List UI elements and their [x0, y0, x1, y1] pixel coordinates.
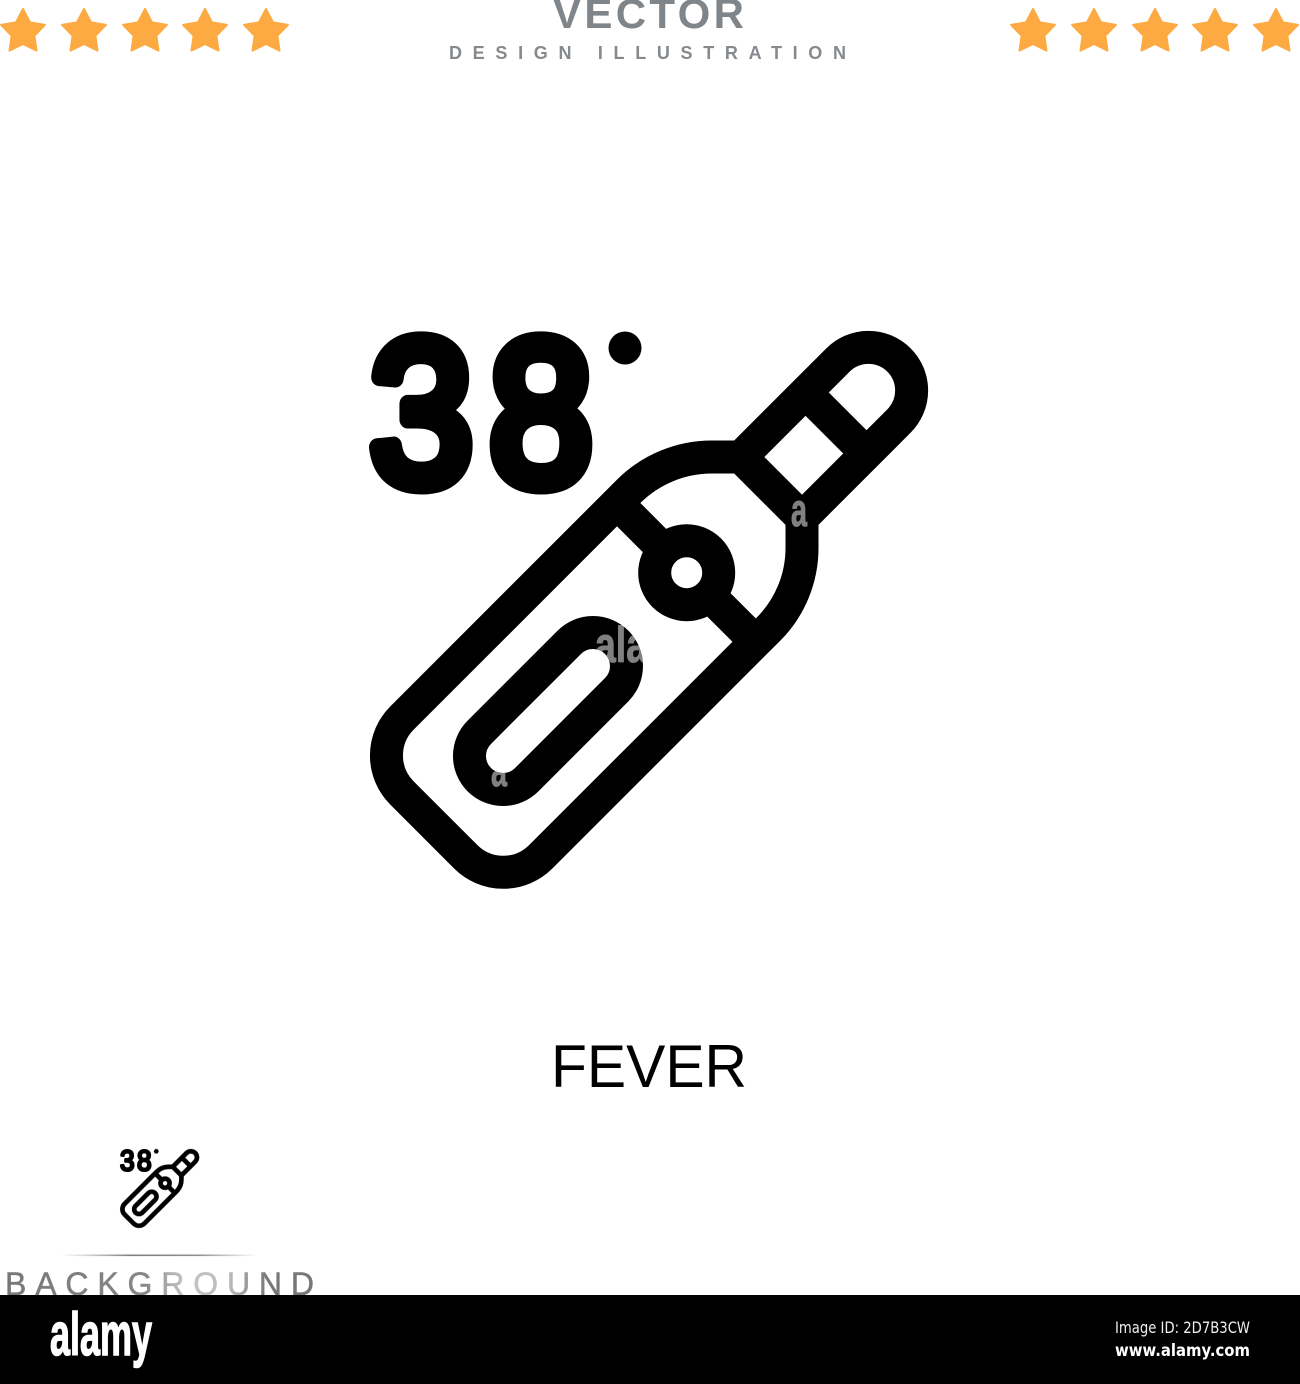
subheading: DESIGN ILLUSTRATION: DESIGN ILLUSTRATION	[449, 43, 846, 63]
thermometer tip	[741, 347, 912, 518]
label: BACKGROUND: BACKGROUND	[5, 1266, 314, 1302]
thermometer	[386, 347, 912, 872]
small thermometer icon	[120, 1144, 197, 1226]
label: FEVER: FEVER	[551, 1033, 747, 1100]
website: www.alamy.com	[1115, 1341, 1250, 1361]
degree dot	[608, 332, 642, 364]
alamy logo: alamy	[50, 1301, 152, 1368]
display window	[469, 633, 626, 790]
watermark fragments visible over black strokes: ala	[595, 617, 648, 673]
rating stars: left	[1, 9, 288, 51]
power button ring	[655, 541, 719, 605]
small thermometer icon: 38	[120, 1144, 152, 1177]
tip divider	[806, 392, 866, 454]
thermometer body	[386, 457, 802, 872]
reading: 38: 38	[370, 298, 592, 528]
icon: thermometer reading 38 degrees	[370, 298, 912, 872]
fading rule above BACKGROUND	[60, 1254, 258, 1256]
watermark fragments visible over black strokes	[491, 484, 807, 796]
watermark fragments visible over black strokes: a	[791, 484, 807, 536]
button spokes	[617, 503, 756, 642]
watermark fragments visible over black strokes: a	[491, 744, 507, 796]
rating stars: right	[1011, 9, 1298, 51]
footer band	[0, 1295, 1300, 1384]
image id: Image ID: 2D7B3CW	[1115, 1318, 1250, 1337]
